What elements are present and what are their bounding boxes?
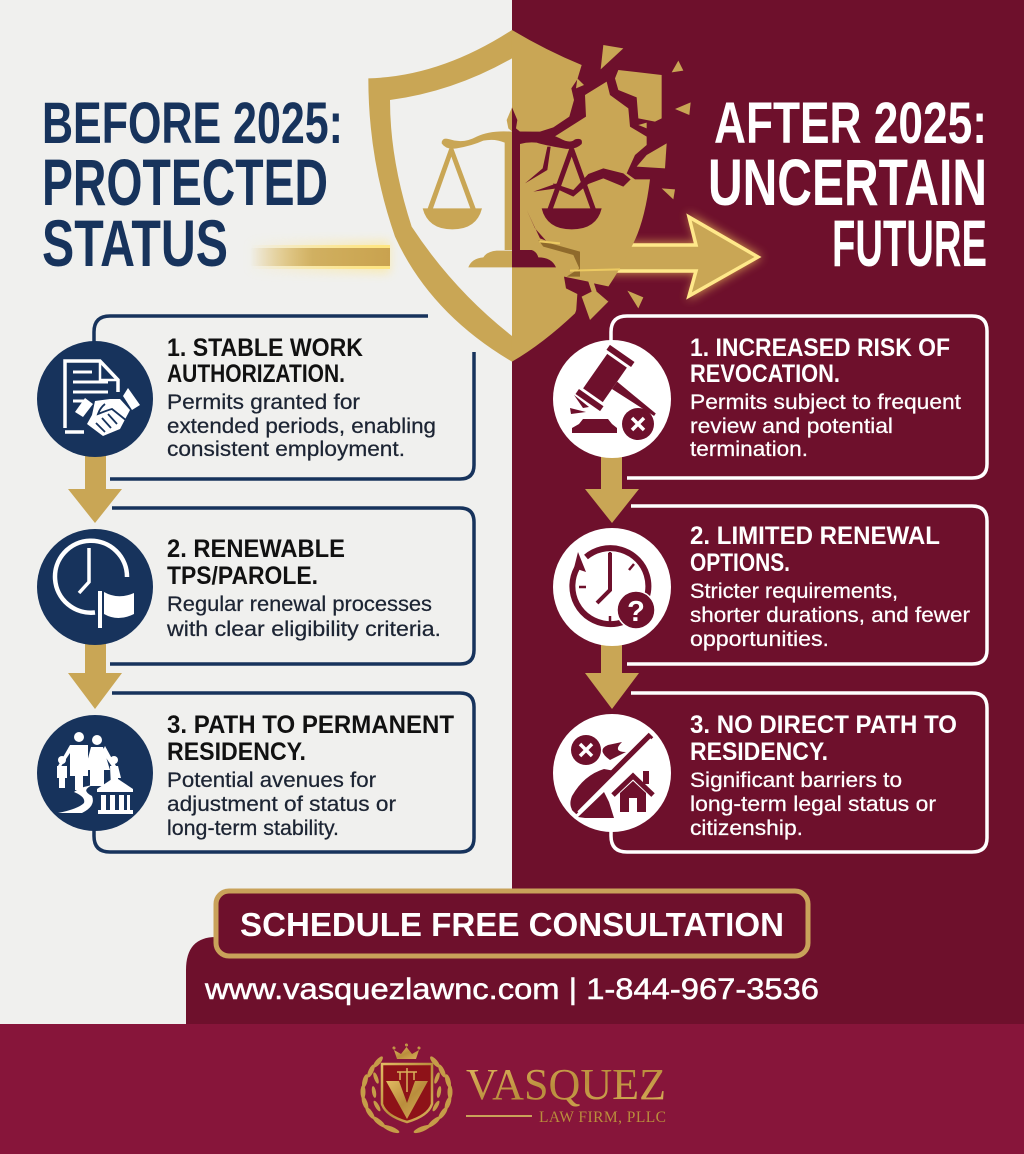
icon: clock with question mark — [553, 528, 671, 646]
right card 2 text: 2. LIMITED RENEWAL — [690, 522, 940, 550]
right card 2 text: opportunities. — [690, 627, 829, 651]
panel: right card 2 — [627, 506, 987, 664]
left card 2 text — [166, 535, 441, 641]
right card 1 text: Permits subject to frequent — [690, 390, 961, 414]
shield: arrow glow through crack — [538, 240, 620, 277]
shield: cracks — [520, 65, 631, 313]
logo: Vasquez Law Firm — [360, 1044, 666, 1135]
right card 1 text: REVOCATION. — [690, 360, 840, 388]
button: schedule free consultation: SCHEDULE FREE CONSULTATION — [240, 906, 784, 943]
logo subtitle: LAW FIRM, PLLC — [539, 1109, 666, 1126]
right card 3 text: RESIDENCY. — [690, 738, 828, 766]
left card 3 text: RESIDENCY. — [167, 738, 306, 766]
shield: left half — [368, 30, 512, 362]
logo V — [386, 1081, 428, 1119]
right card 2 text: shorter durations, and fewer — [690, 603, 970, 627]
icon: gavel with x — [553, 340, 673, 458]
shield: right half cracked — [512, 30, 650, 362]
right card 3 text — [690, 711, 957, 840]
left card 2 text: TPS/PAROLE. — [167, 562, 318, 590]
icon: family and courthouse — [37, 715, 153, 831]
logo laurel left — [360, 1055, 400, 1135]
right card 3 text: 3. NO DIRECT PATH TO — [690, 711, 957, 739]
left card 1 text: 1. STABLE WORK — [167, 334, 363, 362]
heading: before 2025: BEFORE 2025: — [42, 91, 343, 156]
right card 2 text — [690, 522, 970, 651]
background: left panel — [0, 0, 512, 1024]
heading: before 2025 — [42, 91, 343, 280]
scales: right dark half — [512, 107, 602, 267]
right card 1 text: review and potential — [690, 414, 893, 438]
left card 3 text: adjustment of status or — [167, 792, 396, 816]
icon: clock and flag — [37, 529, 153, 645]
footer band — [0, 1024, 1024, 1154]
right card 2 text: OPTIONS. — [690, 549, 790, 577]
right card 1 text: termination. — [690, 437, 808, 461]
icon: document and handshake — [37, 341, 153, 457]
left card 1 text: Permits granted for — [167, 390, 360, 414]
arrow: right 1 to 2 — [585, 455, 639, 523]
scales: left gold half — [423, 107, 512, 267]
left card 1 text: consistent employment. — [167, 437, 405, 461]
right card 3 text: Significant barriers to — [690, 768, 902, 792]
panel: left card 1 — [94, 316, 474, 479]
logo scales — [397, 1068, 417, 1092]
arrow: left 1 to 2 — [68, 455, 122, 523]
right card 3 text: long-term legal status or — [690, 792, 936, 816]
panel: left card 3 — [94, 693, 474, 852]
right card 2 text: Stricter requirements, — [690, 579, 898, 603]
heading: before 2025: PROTECTED — [42, 145, 328, 219]
background: right panel — [186, 0, 1024, 1024]
arrow: left 2 to 3 — [68, 644, 122, 709]
left card 3 text: Potential avenues for — [167, 768, 376, 792]
left card 3 text: long-term stability. — [167, 816, 339, 840]
heading: before 2025: STATUS — [42, 206, 228, 280]
logo rule — [466, 1115, 532, 1117]
panel: right card 3 — [611, 693, 987, 852]
icon: crossed out path and house — [553, 714, 671, 832]
left card 3 text: 3. PATH TO PERMANENT — [167, 711, 454, 739]
contact line: www.vasquezlawnc.com | 1-844-967-3536 — [204, 973, 819, 1006]
arrow: right 2 to 3 — [585, 644, 639, 709]
right card 3 text: citizenship. — [690, 816, 803, 840]
left card 1 text: AUTHORIZATION. — [167, 360, 345, 388]
logo laurel right — [413, 1055, 453, 1135]
left card 2 text: 2. RENEWABLE — [167, 535, 345, 563]
right card 1 text: 1. INCREASED RISK OF — [690, 334, 950, 362]
icon: clock with question mark: ? — [627, 596, 645, 628]
shield: flying fragments — [576, 45, 691, 308]
panel: left card 2 — [110, 508, 474, 664]
left card 3 text — [167, 711, 454, 840]
shield with scales — [368, 30, 691, 362]
heading: after 2025 — [708, 91, 987, 280]
button: schedule free consultation — [216, 891, 808, 956]
right card 1 text — [690, 334, 961, 461]
left card 1 text — [167, 334, 436, 461]
panel: right card 1 — [611, 316, 987, 478]
arrow: left glowing bar — [245, 241, 390, 273]
shield: upper right shard — [615, 70, 662, 122]
logo crown — [392, 1044, 420, 1059]
arrow: right glowing arrow — [600, 213, 762, 300]
left card 2 text: with clear eligibility criteria. — [166, 617, 441, 641]
left card 1 text: extended periods, enabling — [167, 414, 436, 438]
logo wordmark: VASQUEZ — [466, 1060, 666, 1109]
logo shield — [382, 1064, 432, 1122]
left card 2 text: Regular renewal processes — [167, 592, 432, 616]
